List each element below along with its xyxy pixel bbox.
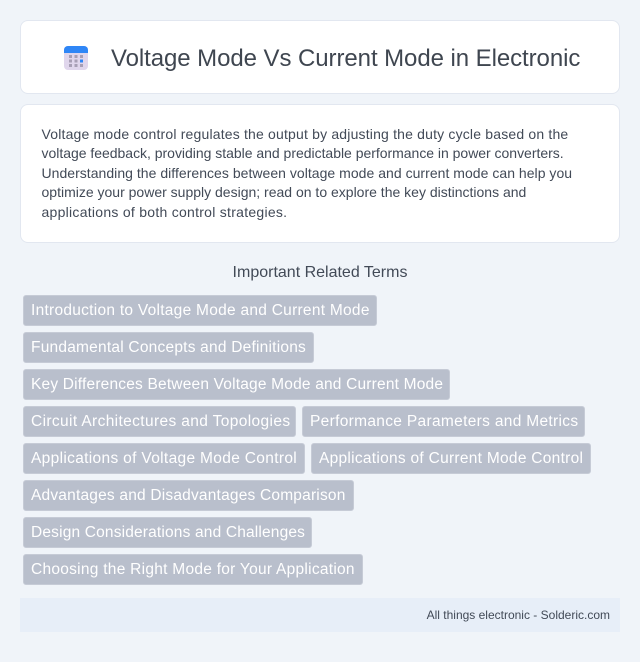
panel: intro text card xyxy=(20,104,620,243)
tag: Applications of Voltage Mode Control xyxy=(31,450,297,467)
tag xyxy=(23,332,314,363)
text block: intro paragraph: Understanding the differences between voltage mode and current mode can help you xyxy=(42,165,572,181)
icon: calendar grid xyxy=(64,46,88,70)
tag xyxy=(23,554,363,585)
tag: Design Considerations and Challenges xyxy=(31,524,305,541)
tag xyxy=(23,517,312,548)
tag xyxy=(23,295,377,326)
text block: intro paragraph: applications of both control strategies. xyxy=(42,204,287,220)
panel: header card xyxy=(20,20,620,94)
tag xyxy=(311,443,591,474)
text block: intro paragraph: optimize your power supply design; read on to explore the key distinctions and xyxy=(42,184,526,200)
footer bar xyxy=(20,598,620,632)
tag: Performance Parameters and Metrics xyxy=(310,413,578,430)
tag: Fundamental Concepts and Definitions xyxy=(31,339,306,356)
heading: important related terms: Important Related Terms xyxy=(233,264,407,281)
tag: Applications of Current Mode Control xyxy=(319,450,583,467)
tag xyxy=(23,406,296,437)
footer credit: All things electronic - Solderic.com xyxy=(427,608,610,622)
tag: Choosing the Right Mode for Your Application xyxy=(31,561,355,578)
tag group: related terms xyxy=(23,295,591,585)
tag: Circuit Architectures and Topologies xyxy=(31,413,290,430)
tag xyxy=(23,443,305,474)
tag xyxy=(302,406,585,437)
text block: intro paragraph xyxy=(42,126,572,220)
title: Voltage Mode Vs Current Mode in Electronic xyxy=(111,45,580,72)
text block: intro paragraph: Voltage mode control regulates the output by adjusting the duty cycle based on the xyxy=(42,126,568,142)
tag: Key Differences Between Voltage Mode and Current Mode xyxy=(31,376,443,393)
tag xyxy=(23,480,354,511)
tag: Advantages and Disadvantages Comparison xyxy=(31,487,346,504)
tag: Introduction to Voltage Mode and Current Mode xyxy=(31,302,370,319)
text block: intro paragraph: voltage feedback, providing stable and predictable performance in power converters. xyxy=(42,145,564,161)
tag xyxy=(23,369,450,400)
